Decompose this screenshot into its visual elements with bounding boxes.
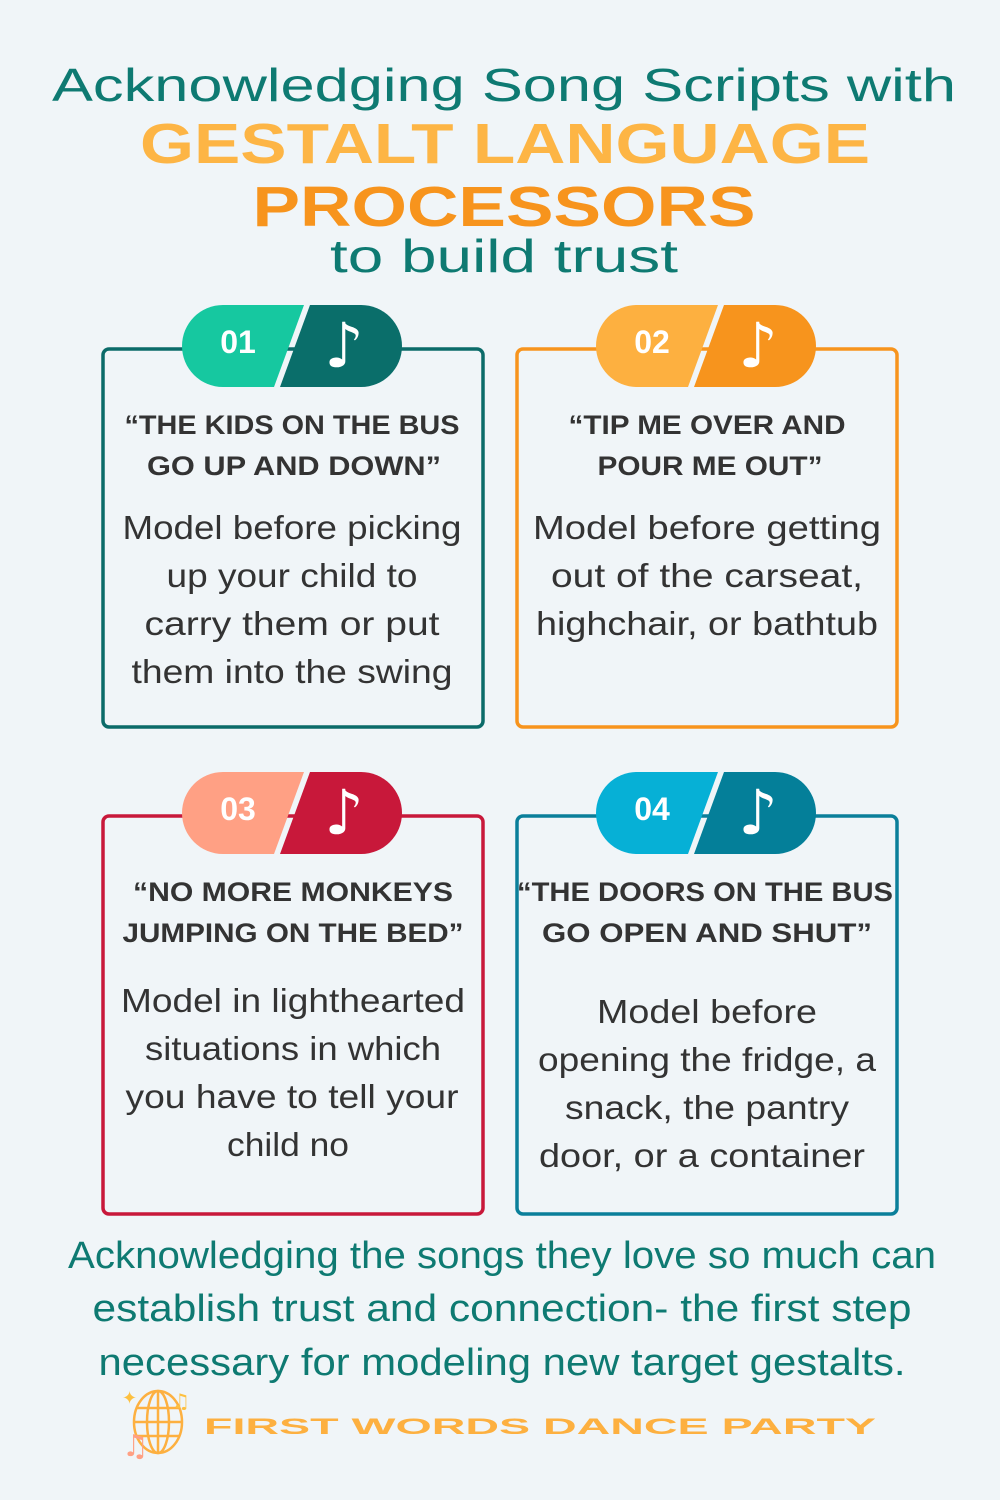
badge 04: ♪ [738, 776, 778, 849]
icon: disco globe logo: ✦ [122, 1388, 137, 1409]
closing text: necessary for modeling new target gestalts. [98, 1342, 906, 1384]
body 1: Model before picking [122, 509, 462, 546]
heading 2: “TIP ME OVER AND [568, 410, 846, 440]
panel: card 4 [517, 772, 897, 1214]
badge 02: 02 [634, 324, 670, 360]
body 2 [533, 509, 881, 642]
heading 2: POUR ME OUT” [598, 451, 822, 481]
title: PROCESSORS [252, 175, 756, 239]
heading 1 [124, 410, 460, 481]
panel: card 1 [103, 305, 483, 727]
body 1: carry them or put [144, 605, 440, 642]
panel: card 3 [103, 772, 483, 1214]
body 3 [121, 982, 465, 1163]
heading 3 [122, 877, 464, 948]
body 4 [538, 993, 877, 1174]
body 1: up your child to [166, 557, 418, 594]
body 4: Model before [597, 993, 817, 1030]
body 2: highchair, or bathtub [536, 605, 878, 642]
body 3: Model in lighthearted [121, 982, 465, 1019]
panel: card 2 [517, 305, 897, 727]
icon: disco globe logo: ♫ [172, 1389, 190, 1413]
badge 01 [182, 305, 402, 387]
body 1 [122, 509, 462, 690]
heading 4: “THE DOORS ON THE BUS [517, 877, 893, 907]
badge 04 [596, 772, 816, 854]
badge 01: 01 [220, 324, 256, 360]
body 2: Model before getting [533, 509, 881, 546]
closing text: establish trust and connection- the first step [92, 1288, 912, 1330]
body 3: child no [227, 1126, 349, 1163]
body 3: situations in which [145, 1030, 441, 1067]
heading 3: JUMPING ON THE BED” [122, 918, 464, 948]
heading 1: “THE KIDS ON THE BUS [124, 410, 460, 440]
badge 03: 03 [220, 791, 256, 827]
body 4: door, or a container [539, 1137, 865, 1174]
heading 2 [568, 410, 846, 481]
footer brand: FIRST WORDS DANCE PARTY [204, 1414, 877, 1439]
closing text [68, 1235, 936, 1384]
body 2: out of the carseat, [551, 557, 863, 594]
body 4: snack, the pantry [565, 1089, 850, 1126]
title [52, 59, 956, 282]
closing text: Acknowledging the songs they love so much can [68, 1235, 936, 1277]
heading 4 [517, 877, 893, 948]
badge 01: ♪ [324, 309, 364, 382]
icon: disco globe logo [122, 1388, 190, 1464]
body 3: you have to tell your [126, 1078, 459, 1115]
badge 02: ♪ [738, 309, 778, 382]
badge 02 [596, 305, 816, 387]
heading 1: GO UP AND DOWN” [147, 451, 441, 481]
badge 03: ♪ [324, 776, 364, 849]
badge 03 [182, 772, 402, 854]
title: Acknowledging Song Scripts with [52, 59, 956, 111]
body 4: opening the fridge, a [538, 1041, 877, 1078]
heading 3: “NO MORE MONKEYS [133, 877, 453, 907]
title: GESTALT LANGUAGE [140, 112, 870, 176]
heading 4: GO OPEN AND SHUT” [542, 918, 872, 948]
body 1: them into the swing [132, 653, 452, 690]
badge 04: 04 [634, 791, 670, 827]
title: to build trust [330, 230, 678, 282]
icon: disco globe logo: ♫ [122, 1429, 149, 1464]
